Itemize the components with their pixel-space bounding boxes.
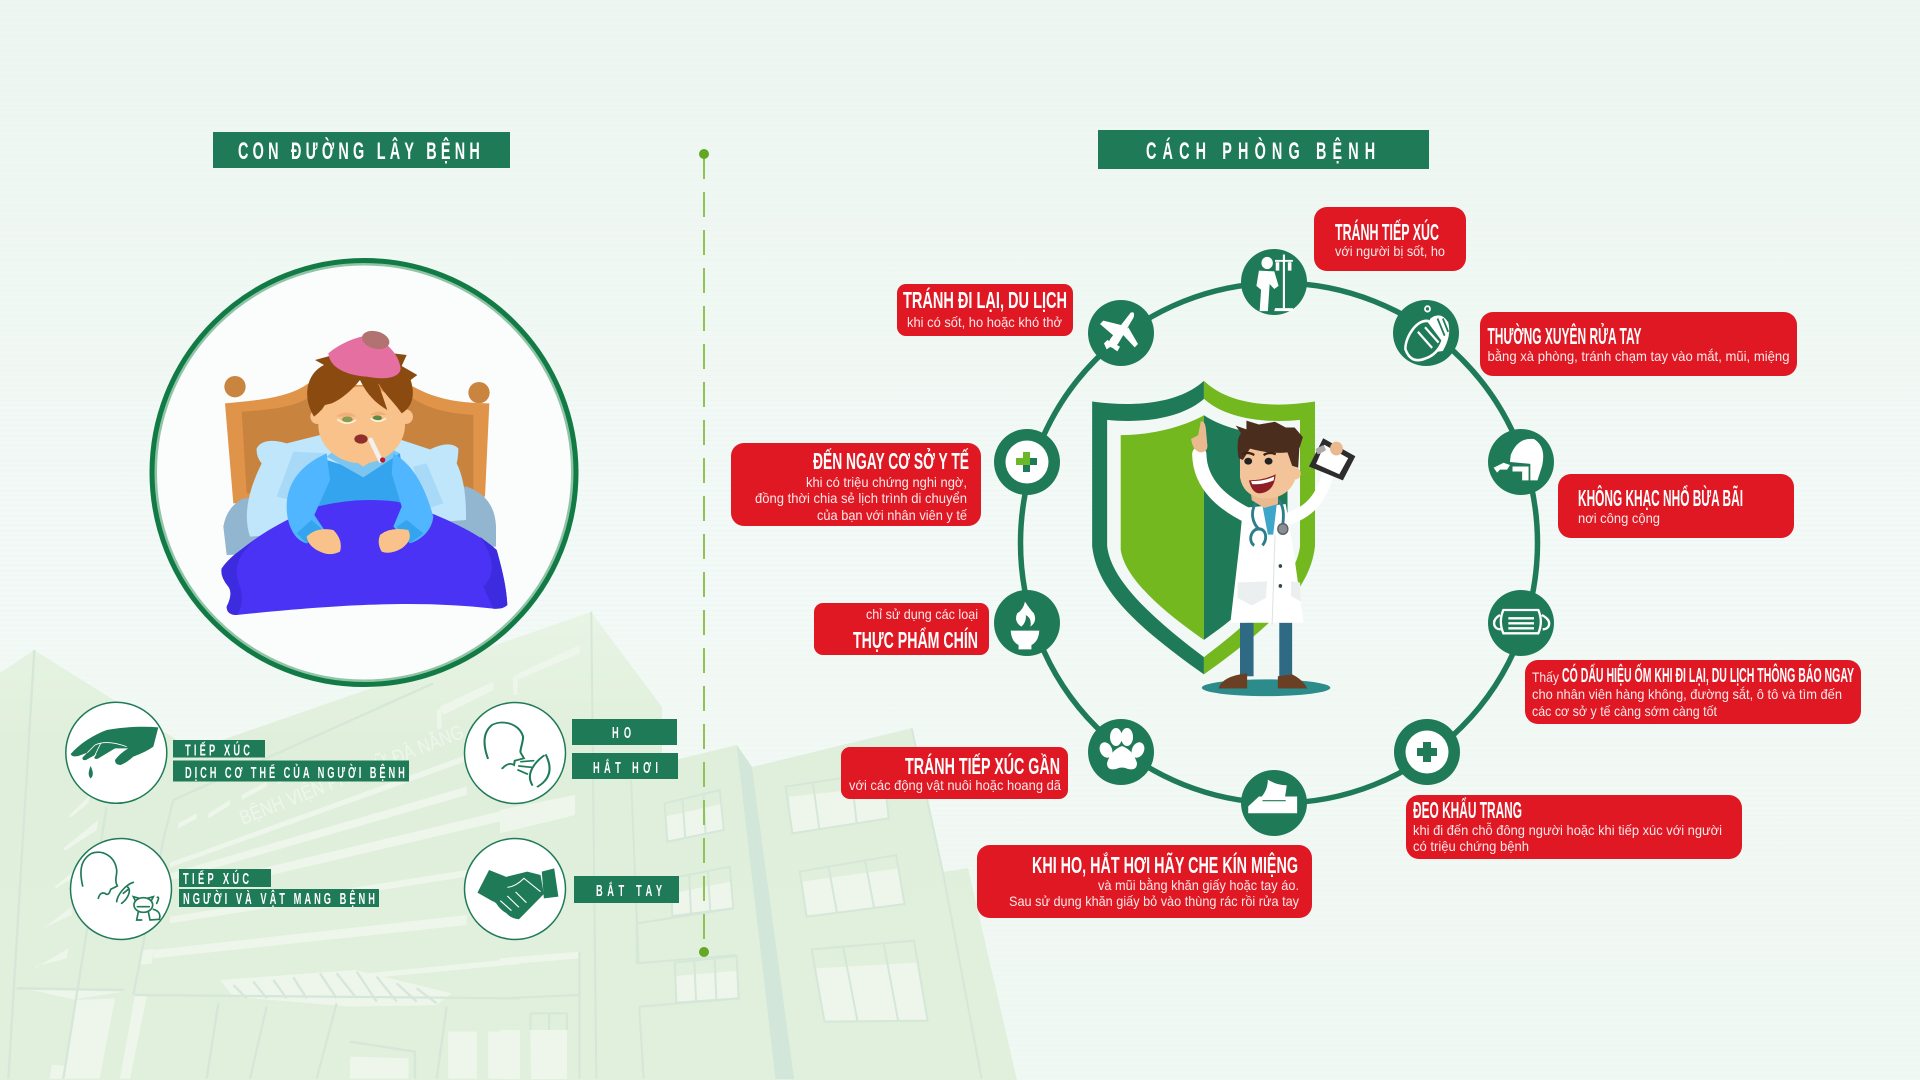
prevention ring (1020, 283, 1538, 803)
item: contact with body fluids: TIẾP XÚC (185, 741, 250, 759)
divider dashed line (699, 149, 709, 957)
callout: report symptoms while travelling (1525, 660, 1861, 724)
callout: cover mouth: và mũi bằng khăn giấy hoặc tay áo. (1098, 877, 1299, 893)
callout: wear mask: khi đi đến chỗ đông người hoặc khi tiếp xúc với người (1413, 822, 1722, 838)
node: hand washing icon (1393, 300, 1459, 366)
item: handshake (464, 838, 679, 940)
callout: no spitting (1558, 474, 1794, 538)
item: cough and sneeze: HẮT HƠI (593, 758, 658, 777)
callout: cooked food (814, 603, 989, 655)
heading: con duong lay benh: CON ĐƯỜNG LÂY BỆNH (238, 136, 480, 165)
callout: go to medical facility (731, 443, 981, 526)
callout: report symptoms while travelling: Thấy (1532, 669, 1559, 685)
node: airplane icon (1088, 300, 1154, 366)
item: contact with carriers (70, 838, 379, 940)
callout: cooked food: chỉ sử dụng các loại (866, 606, 978, 622)
callout: go to medical facility: khi có triệu chứng nghi ngờ, (806, 474, 967, 490)
callout: cover mouth: Sau sử dụng khăn giấy bỏ vào thùng rác rồi rửa tay (1009, 893, 1299, 909)
node: cross icon left (994, 429, 1060, 495)
node: tissue box icon (1241, 770, 1307, 836)
callout: avoid contact (1314, 207, 1466, 271)
node: paw icon (1088, 719, 1154, 785)
callout: avoid animals (841, 747, 1068, 799)
icon: person coughing (484, 722, 550, 787)
callout: report symptoms while travelling: cho nhân viên hàng không, đường sắt, ô tô và tìm đến (1532, 686, 1842, 702)
background hospital building (0, 612, 1017, 1080)
callout: cover mouth (977, 845, 1312, 918)
node: IV stand icon (1241, 249, 1307, 315)
callout: wear mask: ĐEO KHẨU TRANG (1413, 796, 1522, 823)
callout: no spitting: KHÔNG KHẠC NHỔ BỪA BÃI (1578, 484, 1743, 511)
callout: avoid contact: TRÁNH TIẾP XÚC (1335, 218, 1439, 245)
heading: con duong lay benh (213, 132, 510, 168)
callout: cooked food: THỰC PHẨM CHÍN (853, 626, 978, 653)
callout: wash hands (1480, 312, 1797, 376)
shield (1092, 381, 1315, 674)
node: no spitting icon (1488, 429, 1554, 495)
item: cough and sneeze: HO (612, 723, 631, 742)
callout: wash hands: bằng xà phòng, tránh chạm tay vào mắt, mũi, miệng (1488, 348, 1790, 364)
doctor character (1191, 421, 1355, 696)
item: cough and sneeze (464, 702, 678, 804)
callout: go to medical facility: đồng thời chia sẻ lịch trình di chuyển (755, 490, 967, 506)
callout: go to medical facility: của bạn với nhân viên y tế (817, 507, 967, 523)
callout: no spitting: nơi công cộng (1578, 510, 1660, 526)
node: cross icon right (1394, 719, 1460, 785)
callout: avoid animals: với các động vật nuôi hoặc hoang dã (849, 777, 1061, 793)
callout: go to medical facility: ĐẾN NGAY CƠ SỞ Y TẾ (813, 446, 969, 474)
callout: avoid travel: khi có sốt, ho hoặc khó thở (907, 314, 1062, 330)
icon: person and cat (81, 852, 160, 920)
callout: avoid animals: TRÁNH TIẾP XÚC GẦN (905, 752, 1060, 779)
heading: cach phong benh (1098, 130, 1429, 169)
item: contact with body fluids (66, 702, 409, 803)
callout: avoid travel (897, 284, 1073, 336)
node: face mask icon (1488, 590, 1554, 656)
item: handshake: BẮT TAY (596, 881, 662, 900)
callout: report symptoms while travelling: các cơ sở y tế càng sớm càng tốt (1532, 703, 1717, 719)
illustration: sick boy in bed (152, 260, 576, 684)
item: contact with carriers: TIẾP XÚC (183, 869, 250, 888)
building right part details (500, 612, 982, 1079)
building left part details (8, 650, 520, 1079)
item: contact with body fluids: DỊCH CƠ THỂ CỦA NGƯỜI BỆNH (185, 763, 405, 782)
callout: cover mouth: KHI HO, HẮT HƠI HÃY CHE KÍN MIỆNG (1032, 851, 1298, 878)
callout: wear mask (1406, 795, 1742, 859)
icon: handshake (477, 868, 558, 919)
node: cooked food icon (994, 590, 1060, 656)
heading: cach phong benh: CÁCH PHÒNG BỆNH (1146, 136, 1375, 165)
callout: wear mask: có triệu chứng bệnh (1413, 838, 1529, 854)
icon: hand with drop (71, 727, 158, 778)
item: contact with carriers: NGƯỜI VÀ VẬT MANG BỆNH (183, 889, 375, 908)
callout: avoid travel: TRÁNH ĐI LẠI, DU LỊCH (903, 286, 1067, 313)
background hospital building: BỆNH VIỆN PHỤ NỮ ĐÀ NẴNG (236, 719, 467, 830)
callout: avoid contact: với người bị sốt, ho (1335, 243, 1445, 259)
callout: wash hands: THƯỜNG XUYÊN RỬA TAY (1488, 321, 1642, 349)
